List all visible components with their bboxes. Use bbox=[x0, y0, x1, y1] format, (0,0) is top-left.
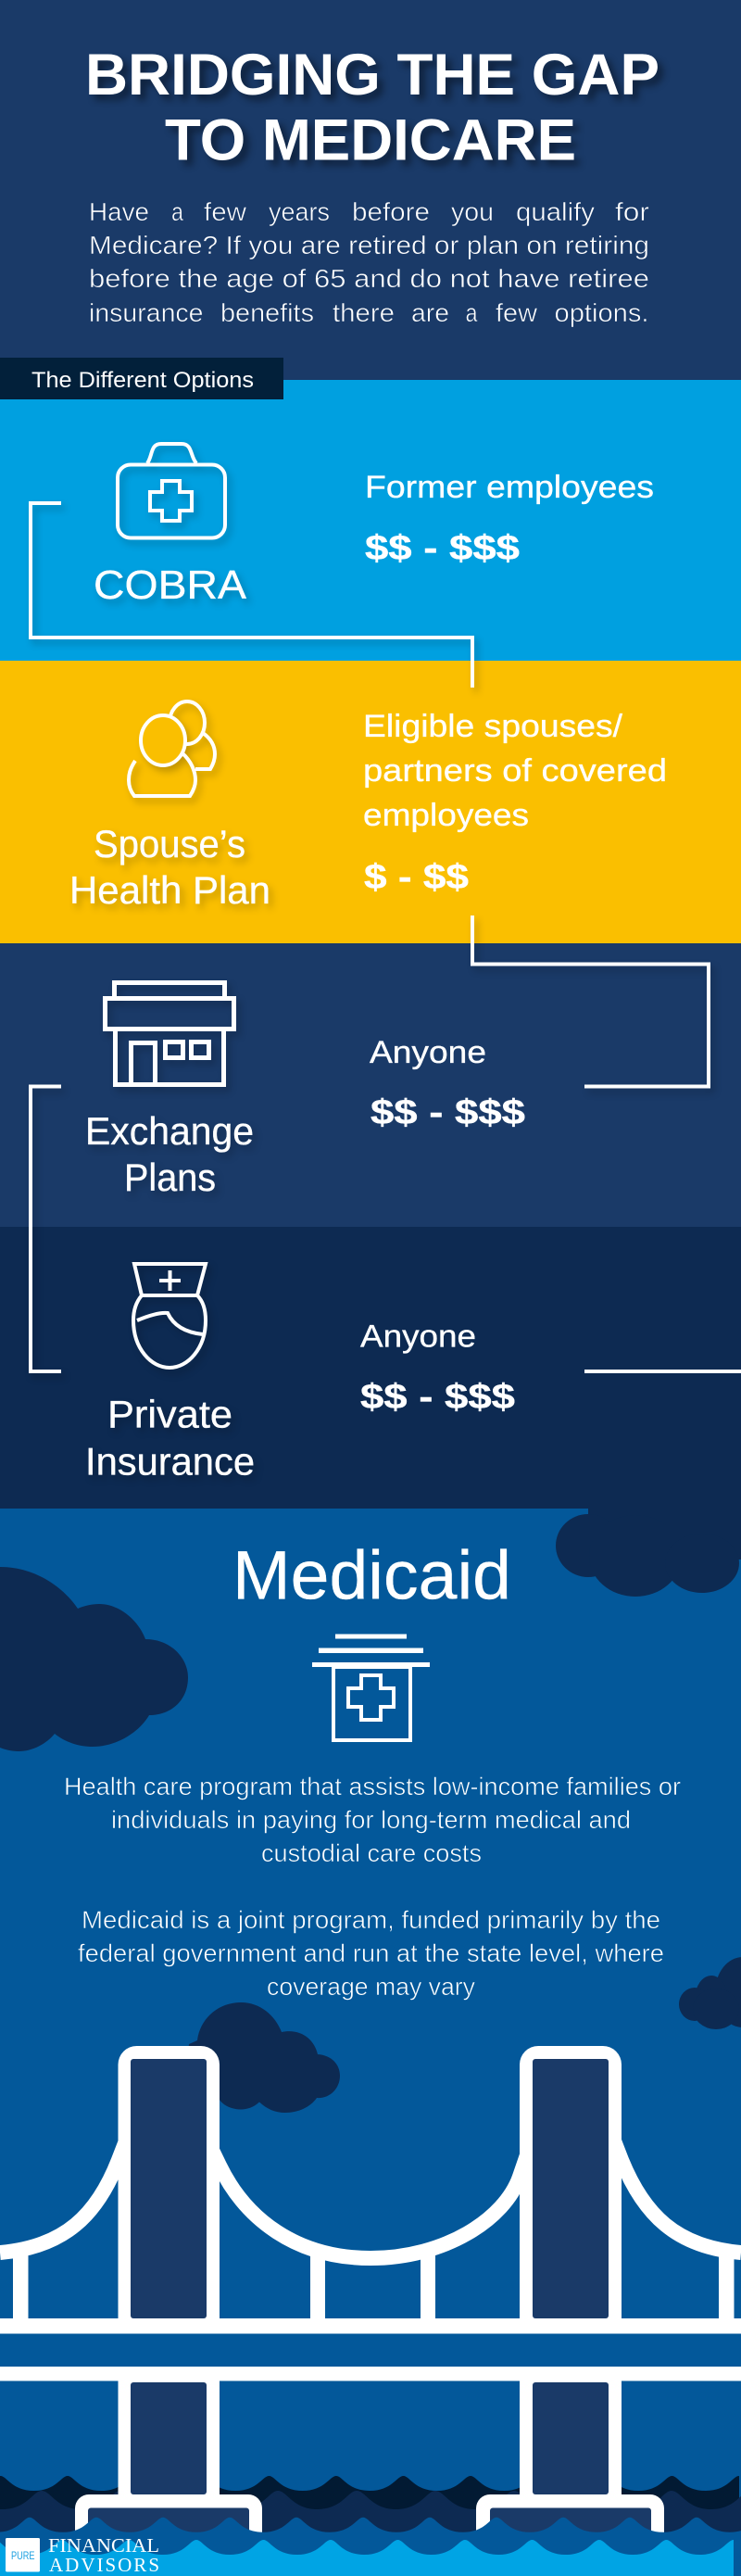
bridge lower piers bbox=[131, 2382, 609, 2494]
icon: storefront bbox=[106, 982, 233, 1084]
label: Exchange Plans: Exchange bbox=[85, 1109, 254, 1153]
icon: nurse bbox=[133, 1264, 206, 1368]
water: front waves bbox=[0, 2518, 741, 2576]
cloud: right bbox=[679, 1957, 741, 2029]
exchange eligibility and cost: $$ - $$$ bbox=[370, 1093, 525, 1132]
label: Spouse's Health Plan: Spouse’s bbox=[94, 822, 245, 865]
label: Exchange Plans: Plans bbox=[124, 1155, 216, 1199]
cloud: top right bbox=[556, 1509, 741, 1597]
bridge deck bbox=[0, 2318, 741, 2381]
panel: header background bbox=[0, 0, 741, 380]
title: TO MEDICARE bbox=[165, 107, 576, 172]
COBRA eligibility and cost bbox=[365, 470, 654, 568]
panel: COBRA background bbox=[0, 380, 741, 661]
connector: left bracket bbox=[31, 1086, 61, 1371]
private insurance eligibility and cost bbox=[360, 1320, 515, 1417]
panel: spouse's health plan background bbox=[0, 661, 741, 943]
label: Spouse's Health Plan bbox=[69, 822, 270, 912]
water: back waves bbox=[0, 2476, 741, 2576]
Medicaid funding note: Medicaid is a joint program, funded primarily by the bbox=[82, 1906, 660, 1934]
label: Exchange Plans bbox=[85, 1109, 254, 1199]
intro text block: options. bbox=[554, 298, 648, 327]
spouse eligibility and cost: Eligible spouses/ bbox=[363, 709, 623, 744]
bridge tower left bbox=[75, 2046, 262, 2535]
icon: Medicaid building bbox=[312, 1635, 430, 1740]
intro text block: few bbox=[496, 298, 538, 327]
intro text block: years bbox=[269, 197, 330, 226]
label: Private Insurance: Insurance bbox=[85, 1440, 255, 1483]
intro text block: a bbox=[171, 197, 183, 226]
Medicaid description: Health care program that assists low-income families or bbox=[64, 1773, 681, 1800]
icon: people bbox=[129, 701, 215, 796]
Medicaid description: custodial care costs bbox=[261, 1839, 482, 1867]
COBRA eligibility and cost: $$ - $$$ bbox=[365, 529, 520, 568]
intro text block: there bbox=[333, 298, 395, 327]
title bbox=[85, 43, 659, 172]
spouse eligibility and cost: partners of covered bbox=[363, 753, 667, 789]
intro text block: Medicare? If you are retired or plan on retiring bbox=[89, 231, 649, 259]
private insurance eligibility and cost: Anyone bbox=[360, 1320, 476, 1355]
panel: private insurance background bbox=[0, 1227, 741, 1509]
spouse eligibility and cost: $ - $$ bbox=[364, 858, 469, 897]
cloud: behind bridge tower bbox=[185, 2002, 340, 2113]
COBRA eligibility and cost: Former employees bbox=[365, 470, 654, 505]
logo: Pure Financial Advisors: PURE bbox=[11, 2549, 35, 2562]
connector: private insurance line bbox=[584, 1370, 741, 1373]
bridge tower right bbox=[476, 2046, 664, 2535]
intro text block: qualify bbox=[516, 197, 595, 226]
logo: Pure Financial Advisors bbox=[6, 2534, 159, 2576]
icon: medical briefcase bbox=[118, 444, 225, 537]
spouse eligibility and cost: employees bbox=[363, 798, 529, 833]
intro text block: insurance bbox=[89, 298, 204, 327]
logo: Pure Financial Advisors: ADVISORS bbox=[49, 2554, 159, 2576]
intro text block: few bbox=[204, 197, 247, 226]
bridge bbox=[0, 2046, 741, 2535]
panel: exchange plans background bbox=[0, 943, 741, 1227]
cloud: left bbox=[0, 1567, 188, 1751]
private insurance eligibility and cost: $$ - $$$ bbox=[360, 1378, 515, 1417]
section tag: the different options bbox=[0, 358, 283, 399]
intro text block: before the age of 65 and do not have retiree bbox=[89, 264, 649, 293]
label: Spouse's Health Plan: Health Plan bbox=[69, 868, 270, 912]
spouse eligibility and cost bbox=[363, 709, 667, 897]
heading: Medicaid: Medicaid bbox=[232, 1536, 511, 1614]
intro text block: Have bbox=[89, 197, 149, 226]
title: BRIDGING THE GAP bbox=[85, 43, 659, 107]
label: COBRA: COBRA bbox=[94, 562, 247, 608]
connector: COBRA to spouse bbox=[31, 503, 472, 688]
intro text block: benefits bbox=[220, 298, 314, 327]
Medicaid funding note: federal government and run at the state level, where bbox=[78, 1939, 664, 1967]
Medicaid funding note bbox=[78, 1906, 664, 2001]
intro text block: before bbox=[352, 197, 430, 226]
exchange eligibility and cost: Anyone bbox=[370, 1035, 486, 1070]
logo: Pure Financial Advisors: FINANCIAL bbox=[48, 2534, 159, 2557]
panel: Medicaid background bbox=[0, 1509, 741, 2576]
bridge cables and hangers bbox=[0, 2131, 741, 2322]
intro text block: a bbox=[465, 298, 478, 327]
label: Private Insurance bbox=[85, 1392, 255, 1483]
intro text block: you bbox=[451, 197, 494, 226]
intro text block: are bbox=[411, 298, 449, 327]
exchange eligibility and cost bbox=[370, 1035, 525, 1132]
Medicaid funding note: coverage may vary bbox=[267, 1973, 475, 2001]
Medicaid description: individuals in paying for long-term medical and bbox=[111, 1806, 631, 1834]
Medicaid description bbox=[64, 1773, 681, 1867]
label: Private Insurance: Private bbox=[107, 1392, 232, 1436]
section tag: the different options: The Different Options bbox=[31, 368, 254, 393]
intro text block: for bbox=[615, 197, 649, 226]
intro text block bbox=[89, 197, 649, 327]
connector: spouse to exchange bbox=[472, 915, 709, 1086]
